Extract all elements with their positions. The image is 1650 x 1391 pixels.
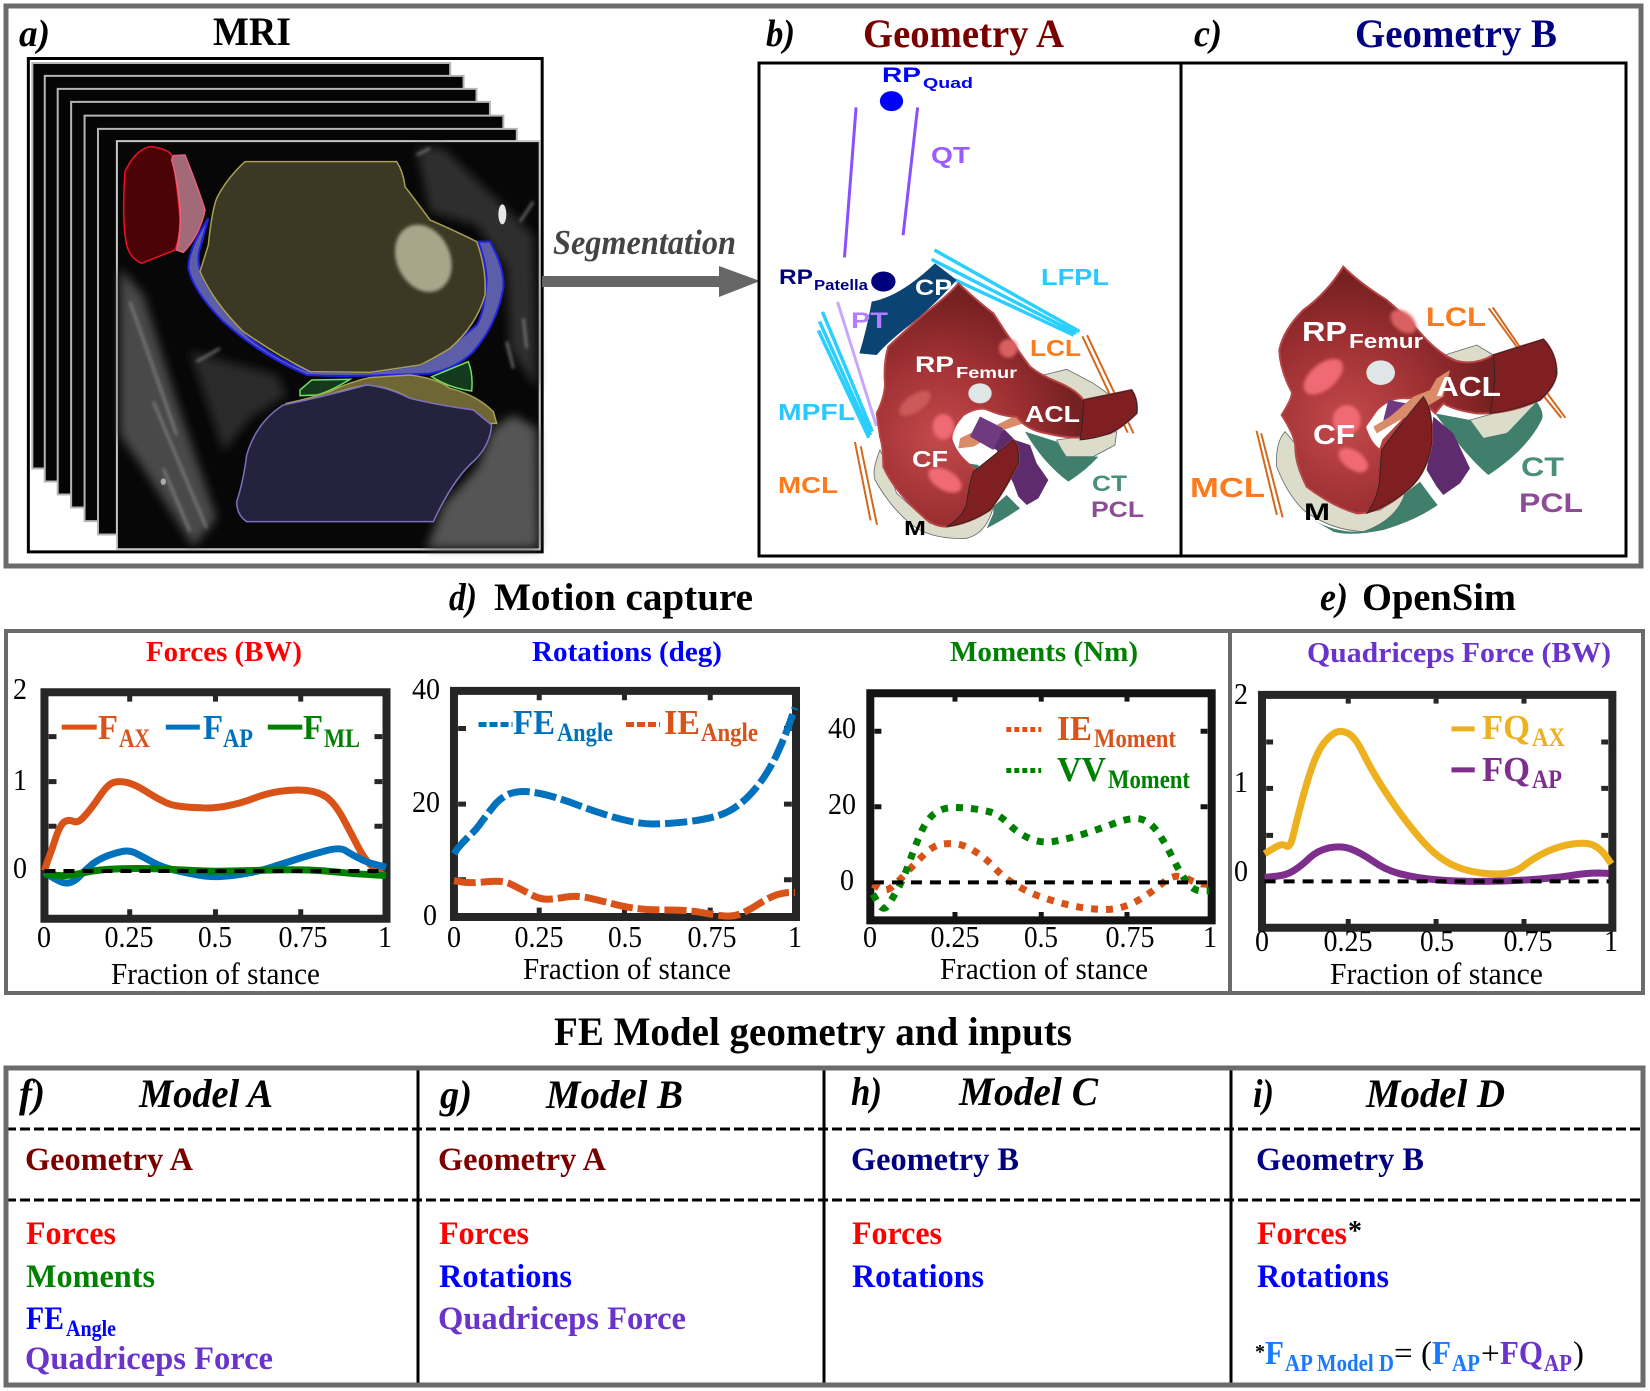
labels: geometry A: RP [915, 352, 954, 377]
column g: Model B: Rotations [439, 1259, 572, 1295]
axis labels [412, 671, 802, 986]
legend labels: FQ [1482, 708, 1530, 747]
column g: Model B: Geometry A [438, 1142, 606, 1178]
legend labels: FE [513, 703, 555, 742]
footnote equation: + [1481, 1336, 1500, 1372]
column g: Model B: Forces [439, 1216, 529, 1252]
plot area with curves [44, 692, 386, 919]
axis labels: Fraction of stance [523, 951, 731, 986]
geometry frames [759, 63, 1626, 556]
legend labels [1482, 708, 1565, 794]
heading: d) Motion capture: d) [449, 576, 477, 619]
column h: Model C: Geometry B [851, 1142, 1019, 1178]
axis labels: 1 [1203, 919, 1217, 954]
labels: geometry B: Femur [1349, 331, 1423, 353]
labels: geometry B [1190, 302, 1583, 526]
column i: Model D [1253, 1071, 1584, 1377]
axis labels: 2 [1234, 676, 1248, 711]
legend labels: ML [324, 724, 360, 753]
panel: motion capture and OpenSim frame [6, 631, 1643, 993]
heading: Geometry A: Geometry A [863, 11, 1064, 56]
labels: geometry A: MCL [778, 472, 838, 498]
labels: geometry A: RP [779, 266, 813, 289]
legend labels: AX [1532, 723, 1565, 752]
legend labels: VV [1057, 750, 1106, 789]
table frame [6, 1068, 1643, 1385]
labels: geometry A [778, 64, 1144, 540]
legend labels: AP [223, 724, 253, 753]
chart: Rotations [412, 636, 802, 986]
footnote equation: = [1394, 1336, 1413, 1372]
legend labels: IE [664, 703, 700, 742]
axis labels: 0.75 [278, 919, 328, 954]
chart title: Moments (Nm) [950, 636, 1138, 668]
column i: Model D: Model D [1365, 1071, 1505, 1116]
labels: geometry A: LCL [1030, 335, 1081, 361]
labels: geometry A: Quad [923, 75, 973, 92]
plot area with curves [1262, 695, 1612, 928]
footnote equation: ( [1421, 1336, 1432, 1372]
legend labels: F [203, 708, 223, 747]
heading: d) Motion capture: Motion capture [494, 576, 753, 619]
footnote equation: * [1255, 1341, 1265, 1363]
axis labels: 0 [863, 919, 877, 954]
column f: Model A: Quadriceps Force [25, 1341, 273, 1377]
footnote equation: FQ [1500, 1335, 1543, 1372]
geometry A knee model [859, 263, 1137, 538]
legend labels: AX [119, 724, 150, 753]
geometry B knee model [1276, 267, 1557, 534]
axis labels: 0 [13, 850, 27, 885]
arrow: segmentation [542, 223, 760, 297]
column h: Model C: Forces [852, 1216, 942, 1252]
axis labels: Fraction of stance [111, 956, 320, 991]
axis labels: 0.5 [198, 919, 232, 954]
column g: Model B: Quadriceps Force [438, 1301, 686, 1337]
axis labels: 2 [13, 671, 27, 706]
labels: geometry A: CT [1092, 471, 1128, 496]
heading: MRI: MRI [213, 9, 291, 54]
labels: geometry A: MPFL [778, 399, 855, 425]
legend labels [513, 703, 758, 747]
axis labels: 1 [1234, 764, 1248, 799]
column i: Model D: Geometry B [1256, 1142, 1424, 1178]
chart title: Forces (BW) [146, 636, 302, 668]
column i: Model D: i) [1253, 1071, 1274, 1116]
plot area with curves [870, 693, 1212, 920]
labels: geometry B: PCL [1519, 488, 1583, 518]
axis labels: 0.25 [514, 919, 564, 954]
axis labels: 20 [828, 786, 856, 821]
column f: Model A: Angle [66, 1316, 116, 1341]
ligament lines and reference points [818, 91, 1565, 525]
axis labels: 1 [378, 919, 392, 954]
arrow shape [542, 266, 760, 297]
axis labels: Fraction of stance [940, 951, 1148, 986]
labels: geometry A: Femur [956, 365, 1017, 382]
panel: top frame for MRI and geometries [6, 6, 1641, 566]
plot area with curves [454, 691, 796, 917]
column i: Model D: Rotations [1257, 1259, 1389, 1295]
panel b and c: geometries [759, 11, 1626, 556]
axis labels: 0 [447, 919, 461, 954]
labels: geometry B: CF [1313, 419, 1355, 450]
axis labels: 20 [412, 784, 440, 819]
label a): a) [19, 13, 50, 55]
panel a: MRI [19, 9, 542, 552]
heading: e) OpenSim: OpenSim [1362, 576, 1516, 619]
segmented MRI slice [120, 147, 538, 548]
axis labels: 0.25 [930, 919, 980, 954]
axis labels: Fraction of stance [1330, 956, 1543, 991]
labels: geometry B: LCL [1426, 302, 1486, 332]
axis labels: 0 [1255, 923, 1269, 958]
column h: Model C [851, 1069, 1099, 1295]
axis labels: 0 [423, 897, 437, 932]
heading: Geometry B: Geometry B [1355, 11, 1557, 56]
labels: geometry A: PT [851, 308, 889, 333]
legend labels: F [303, 708, 323, 747]
footnote equation: AP [1544, 1351, 1572, 1377]
axis labels: 0.5 [1420, 923, 1454, 958]
axis labels: 0.5 [608, 919, 642, 954]
labels: geometry B: ACL [1436, 371, 1501, 402]
column g: Model B: Model B [545, 1072, 683, 1117]
heading: FE Model geometry and inputs: FE Model geometry and inputs [554, 1009, 1072, 1054]
legend labels [98, 708, 360, 753]
column f: Model A [19, 1071, 273, 1377]
column g: Model B: g) [439, 1072, 472, 1117]
legend labels: IE [1057, 709, 1092, 748]
axis labels: 0.75 [1504, 923, 1552, 958]
labels: geometry A: Patella [814, 277, 869, 294]
axis labels: 0.25 [1324, 923, 1372, 958]
column i: Model D: Forces [1257, 1216, 1347, 1252]
axis labels: 0.75 [1106, 919, 1154, 954]
column h: Model C: Model C [958, 1069, 1099, 1114]
column f: Model A: FE [26, 1301, 64, 1337]
heading: e) OpenSim: e) [1320, 576, 1348, 619]
chart: Forces [13, 636, 392, 991]
labels: geometry B: CT [1521, 452, 1565, 482]
axis labels: 0 [37, 919, 51, 954]
labels: geometry A: LFPL [1041, 264, 1109, 290]
labels: geometry A: M [904, 518, 926, 540]
label c): c) [1194, 13, 1222, 55]
axis labels: 0.25 [104, 919, 154, 954]
legend labels: Moment [1108, 765, 1190, 794]
labels: geometry B: M [1304, 499, 1330, 526]
axis labels: 1 [13, 762, 27, 797]
chart title: Rotations (deg) [532, 636, 722, 668]
chart: Moments [828, 636, 1217, 986]
legend labels: Moment [1094, 724, 1176, 753]
column g: Model B [438, 1072, 686, 1337]
axis labels: 0.75 [688, 919, 736, 954]
column h: Model C: Rotations [852, 1259, 984, 1295]
labels: geometry A: ACL [1025, 401, 1080, 427]
labels: geometry A: CP [915, 275, 952, 300]
legend labels: FQ [1482, 750, 1530, 789]
legend labels [1057, 709, 1190, 794]
labels: geometry A: QT [931, 142, 970, 168]
legend labels: AP [1532, 765, 1562, 794]
axis labels: 0 [840, 862, 854, 897]
axis labels: 40 [412, 671, 440, 706]
axis labels: 40 [828, 710, 856, 745]
footnote equation: AP Model D [1285, 1351, 1394, 1377]
column f: Model A: f) [19, 1071, 45, 1116]
legend labels: F [98, 708, 118, 747]
column f: Model A: Geometry A [25, 1142, 193, 1178]
arrow label: Segmentation: Segmentation [553, 223, 736, 262]
legend labels: Angle [557, 718, 613, 747]
footnote equation [1255, 1335, 1584, 1377]
column i: Model D: * [1348, 1216, 1362, 1247]
labels: geometry B: RP [1302, 316, 1347, 347]
footnote equation: AP [1452, 1351, 1480, 1377]
axis labels: 1 [788, 919, 802, 954]
axis labels: 1 [1604, 923, 1618, 958]
footnote equation: ) [1573, 1336, 1584, 1372]
footnote equation: F [1265, 1335, 1284, 1372]
column f: Model A: Model A [138, 1071, 273, 1116]
column f: Model A: Moments [26, 1259, 155, 1295]
axis labels [13, 671, 392, 991]
labels: geometry A: PCL [1091, 497, 1144, 522]
column h: Model C: h) [851, 1069, 882, 1114]
label b): b) [766, 13, 795, 55]
legend labels: Angle [701, 718, 758, 747]
labels: geometry A: CF [912, 446, 948, 472]
labels: geometry B: MCL [1190, 472, 1265, 503]
axis labels: 0 [1234, 853, 1248, 888]
chart: Quadriceps Force [1234, 637, 1618, 991]
axis labels [1234, 676, 1618, 991]
column f: Model A: Forces [26, 1216, 116, 1252]
axis labels [828, 710, 1217, 986]
footnote equation: F [1432, 1335, 1451, 1372]
labels: geometry A: RP [882, 64, 921, 87]
chart title: Quadriceps Force (BW) [1307, 637, 1611, 669]
MRI slice stack frame [28, 59, 542, 552]
axis labels: 0.5 [1024, 919, 1058, 954]
